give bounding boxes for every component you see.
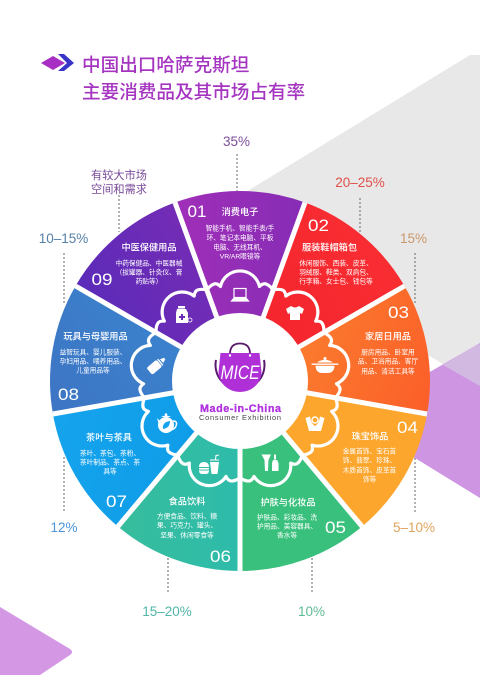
body text: 厨房用品、卧室用: [361, 349, 415, 356]
body text: 金属首饰、宝石首: [343, 448, 396, 455]
panel: 05 skincare and cosmetics: [240, 432, 362, 571]
body text: 中药保健品、中医器械: [116, 260, 182, 267]
number 03: 03: [388, 304, 409, 322]
heading: 护肤与化妆品: [260, 496, 316, 507]
body text: 木质首饰、皮革首: [343, 465, 397, 474]
panel: 08 toys and baby goods: [50, 286, 183, 414]
body text: 饰等: [363, 474, 376, 483]
panel: 01 consumer electronics: [175, 191, 305, 319]
heading: 茶叶与茶具: [86, 431, 132, 442]
body text: 休闲服饰、西装、皮革、: [299, 260, 373, 267]
logo text: Made-in-China: Made-in-China: [200, 403, 282, 415]
heading: 消费电子: [222, 206, 258, 217]
body text: 茶叶、茶包、茶粉、: [80, 450, 140, 457]
number 08: 08: [58, 386, 79, 404]
body text: 香水等: [277, 530, 297, 539]
icon: brush and bottle: [262, 454, 278, 471]
heading: 服装鞋帽箱包: [302, 241, 357, 252]
body text: 果、巧克力、罐头、: [157, 520, 217, 529]
icon: teapot: [157, 413, 177, 433]
panel: 09 TCM health goods: [76, 202, 217, 348]
body text: 坚果、休闲零食等: [160, 530, 214, 539]
body text: 益智玩具、婴儿服装、: [60, 349, 126, 356]
percent: 10%: 10%: [298, 604, 325, 619]
number 04: 04: [397, 419, 418, 437]
centre white circle: [172, 313, 308, 449]
logo text: Consumer Exhibition: Consumer Exhibition: [199, 413, 281, 422]
number 09: 09: [92, 271, 112, 289]
icon: baby bottle: [146, 355, 168, 375]
note: market space: 有较大市场: [91, 170, 147, 182]
icon: necklace: [306, 416, 324, 431]
number 02: 02: [308, 217, 329, 235]
heading: 珠宝饰品: [352, 430, 388, 441]
title: 中国出口哈萨克斯坦: [82, 54, 249, 76]
logo: MICE shopping bag: [215, 344, 264, 392]
body text: VR/AR眼镜等: [220, 252, 261, 260]
icon: laptop: [232, 288, 248, 301]
leader lines: [64, 154, 415, 594]
percent: 15%: 15%: [400, 231, 427, 246]
body text: 方便食品、饮料、糖: [157, 513, 217, 520]
percent: 10-15%: 10–15%: [39, 231, 88, 246]
percent: 15-20%: 15–20%: [142, 604, 192, 619]
icon: shirt: [286, 306, 304, 320]
body text: 护用品、美容器具、: [257, 521, 317, 530]
panel: 07 tea: [53, 392, 198, 526]
percent: 20-25%: 20–25%: [335, 175, 385, 190]
title icon: diamond and chevron: [41, 54, 74, 71]
panel: 06 food and drink: [118, 432, 240, 571]
title: 主要消费品及其市场占有率: [82, 82, 305, 102]
number 06: 06: [210, 548, 231, 566]
percent: 5-10%: 5–10%: [393, 520, 435, 535]
icon: medicine bottle: [176, 306, 192, 323]
percent: 35%: 35%: [223, 134, 250, 149]
background: purple triangle right: [350, 343, 480, 498]
icon: pot: [312, 357, 338, 373]
body text: 电脑、无线耳机、: [213, 242, 267, 252]
body text: 茶叶制品、茶点、茶: [80, 457, 140, 466]
body text: 儿童用品等: [76, 365, 110, 374]
body text: 品、卫浴用品、客厅: [358, 356, 418, 365]
heading: 中医保健用品: [121, 241, 177, 252]
heading: 家居日用品: [365, 330, 411, 341]
percent: 12%: 12%: [50, 520, 78, 535]
background: triangle overlap: [443, 344, 480, 386]
body text: 用品、清洁工具等: [361, 366, 415, 375]
heading: 食品饮料: [169, 495, 205, 506]
body text: 具等: [103, 466, 117, 475]
panel: 03 home goods: [297, 286, 430, 414]
body text: 护肤品、彩妆品、洗: [257, 514, 317, 521]
body text: 行李箱、女士包、钱包等: [299, 276, 373, 285]
heading: 玩具与母婴用品: [63, 331, 128, 341]
body text: 饰、翡翠、珍珠、: [343, 455, 396, 464]
body text: 羽绒服、鞋类、双肩包、: [299, 267, 373, 276]
body text: 环、笔记本电脑、平板: [207, 233, 274, 242]
number 07: 07: [106, 493, 127, 511]
background: grey triangle: [200, 55, 480, 386]
number 05: 05: [325, 519, 346, 537]
panel: 04 jewellery: [282, 392, 427, 526]
icon: burger and drink: [199, 454, 219, 474]
background: purple triangle bottom left: [0, 607, 72, 675]
body text: （拔罐器、针灸仪、膏: [116, 267, 183, 276]
body text: 智能手机、智能手表/手: [206, 226, 274, 232]
number 01: 01: [188, 203, 206, 221]
note: market space: 空间和需求: [91, 182, 147, 196]
body text: 孕妇用品、喂养用品、: [60, 356, 126, 365]
body text: 药贴等）: [136, 276, 162, 285]
panel: 02 clothing: [263, 202, 404, 348]
logo: MICE shopping bag: MICE: [220, 362, 260, 384]
